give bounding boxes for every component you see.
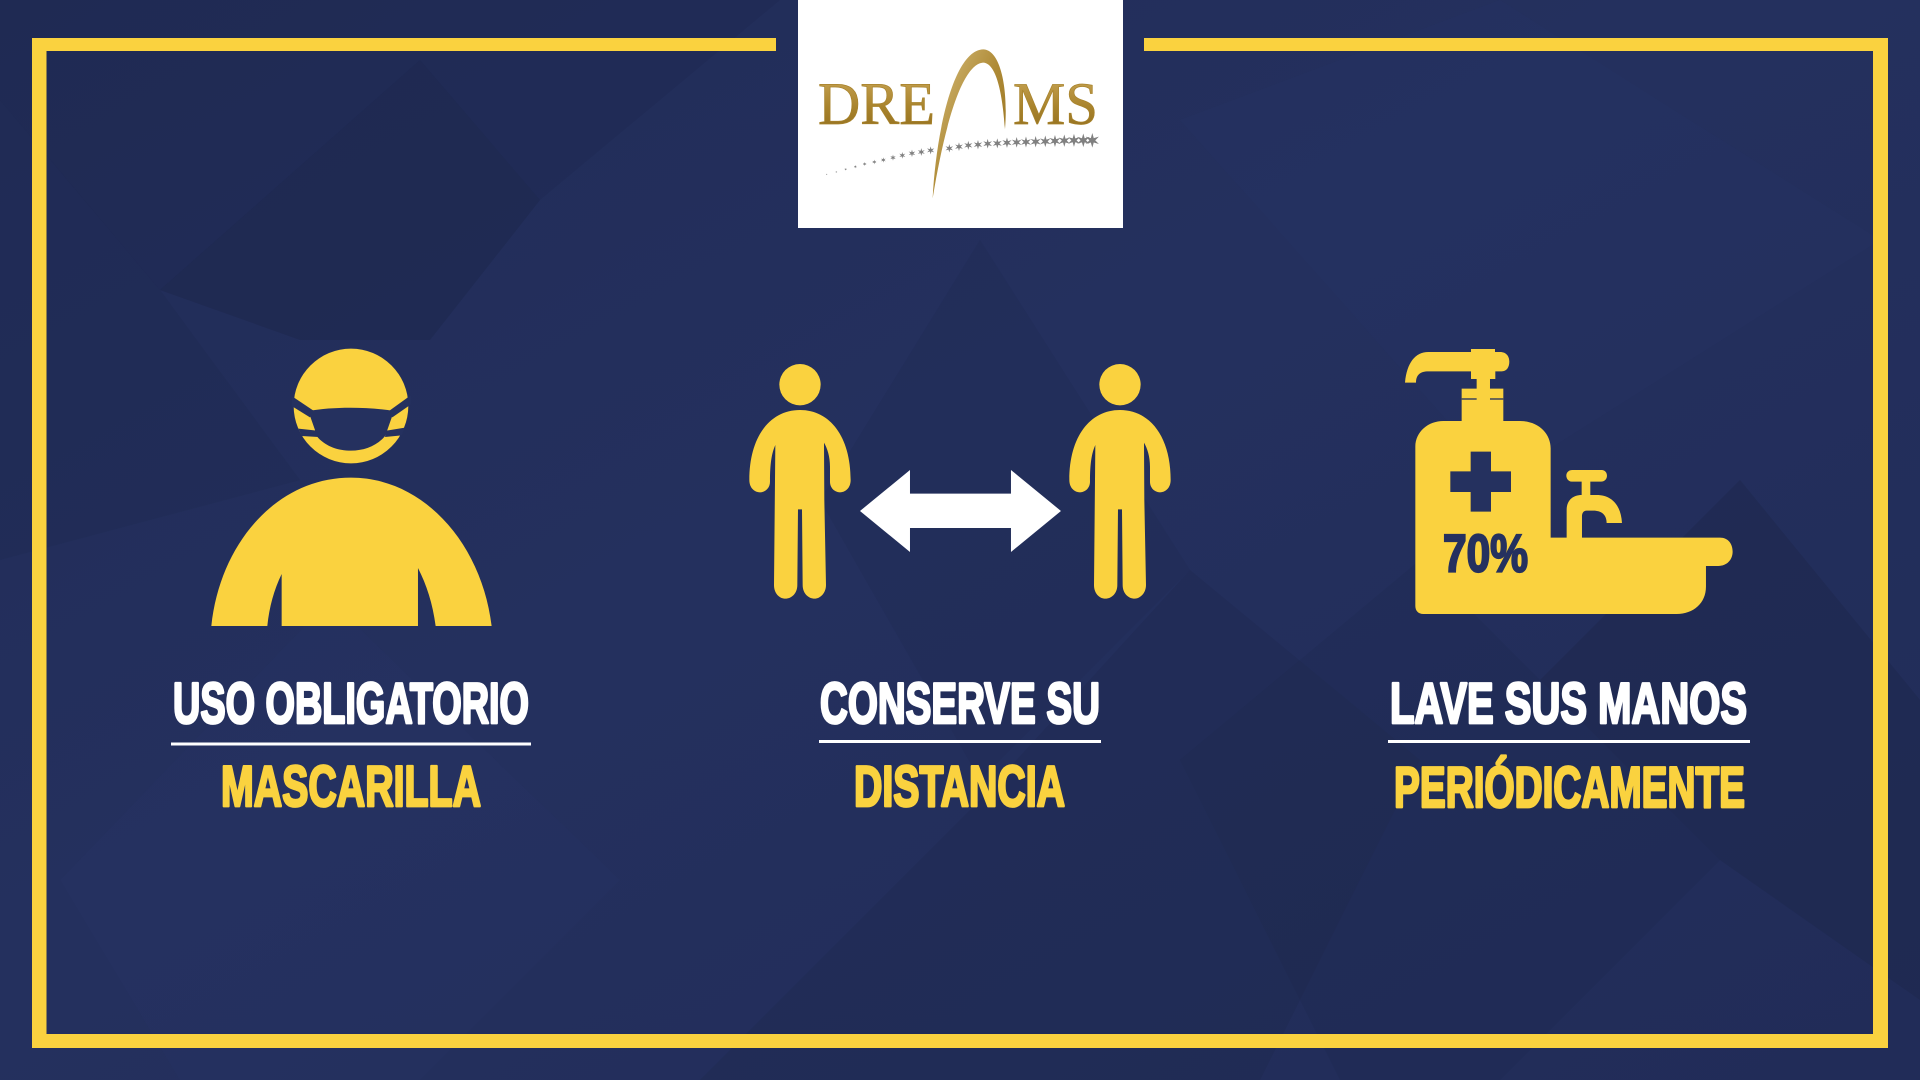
heading: conserve su: CONSERVE SU <box>820 672 1100 736</box>
icon: right person <box>1069 364 1171 599</box>
logo panel <box>798 0 1123 228</box>
subheading: periodicamente: PERIÓDICAMENTE <box>1394 756 1745 820</box>
logo text: DRE: DRE <box>818 71 935 137</box>
logo text: MS: MS <box>1013 71 1098 137</box>
divider <box>819 740 1101 743</box>
subheading: distancia: DISTANCIA <box>854 755 1065 819</box>
heading: uso obligatorio: USO OBLIGATORIO <box>173 672 529 736</box>
subheading: mascarilla: MASCARILLA <box>221 755 481 819</box>
icon: sanitizer bottle and sink <box>1405 349 1733 614</box>
divider <box>171 742 531 746</box>
icon: person wearing mask <box>211 349 492 626</box>
heading: lave sus manos: LAVE SUS MANOS <box>1390 672 1747 736</box>
divider <box>1388 740 1750 743</box>
panel: lavado <box>1388 349 1750 820</box>
panel: mascarilla <box>171 349 531 819</box>
logo arc <box>933 49 1006 198</box>
logo stars <box>826 133 1099 175</box>
icon: cross <box>1450 452 1511 512</box>
arrow: double-headed <box>860 470 1061 552</box>
icon: left person <box>749 364 851 599</box>
label: 70%: 70% <box>1443 524 1528 584</box>
panel: distancia <box>749 364 1171 819</box>
